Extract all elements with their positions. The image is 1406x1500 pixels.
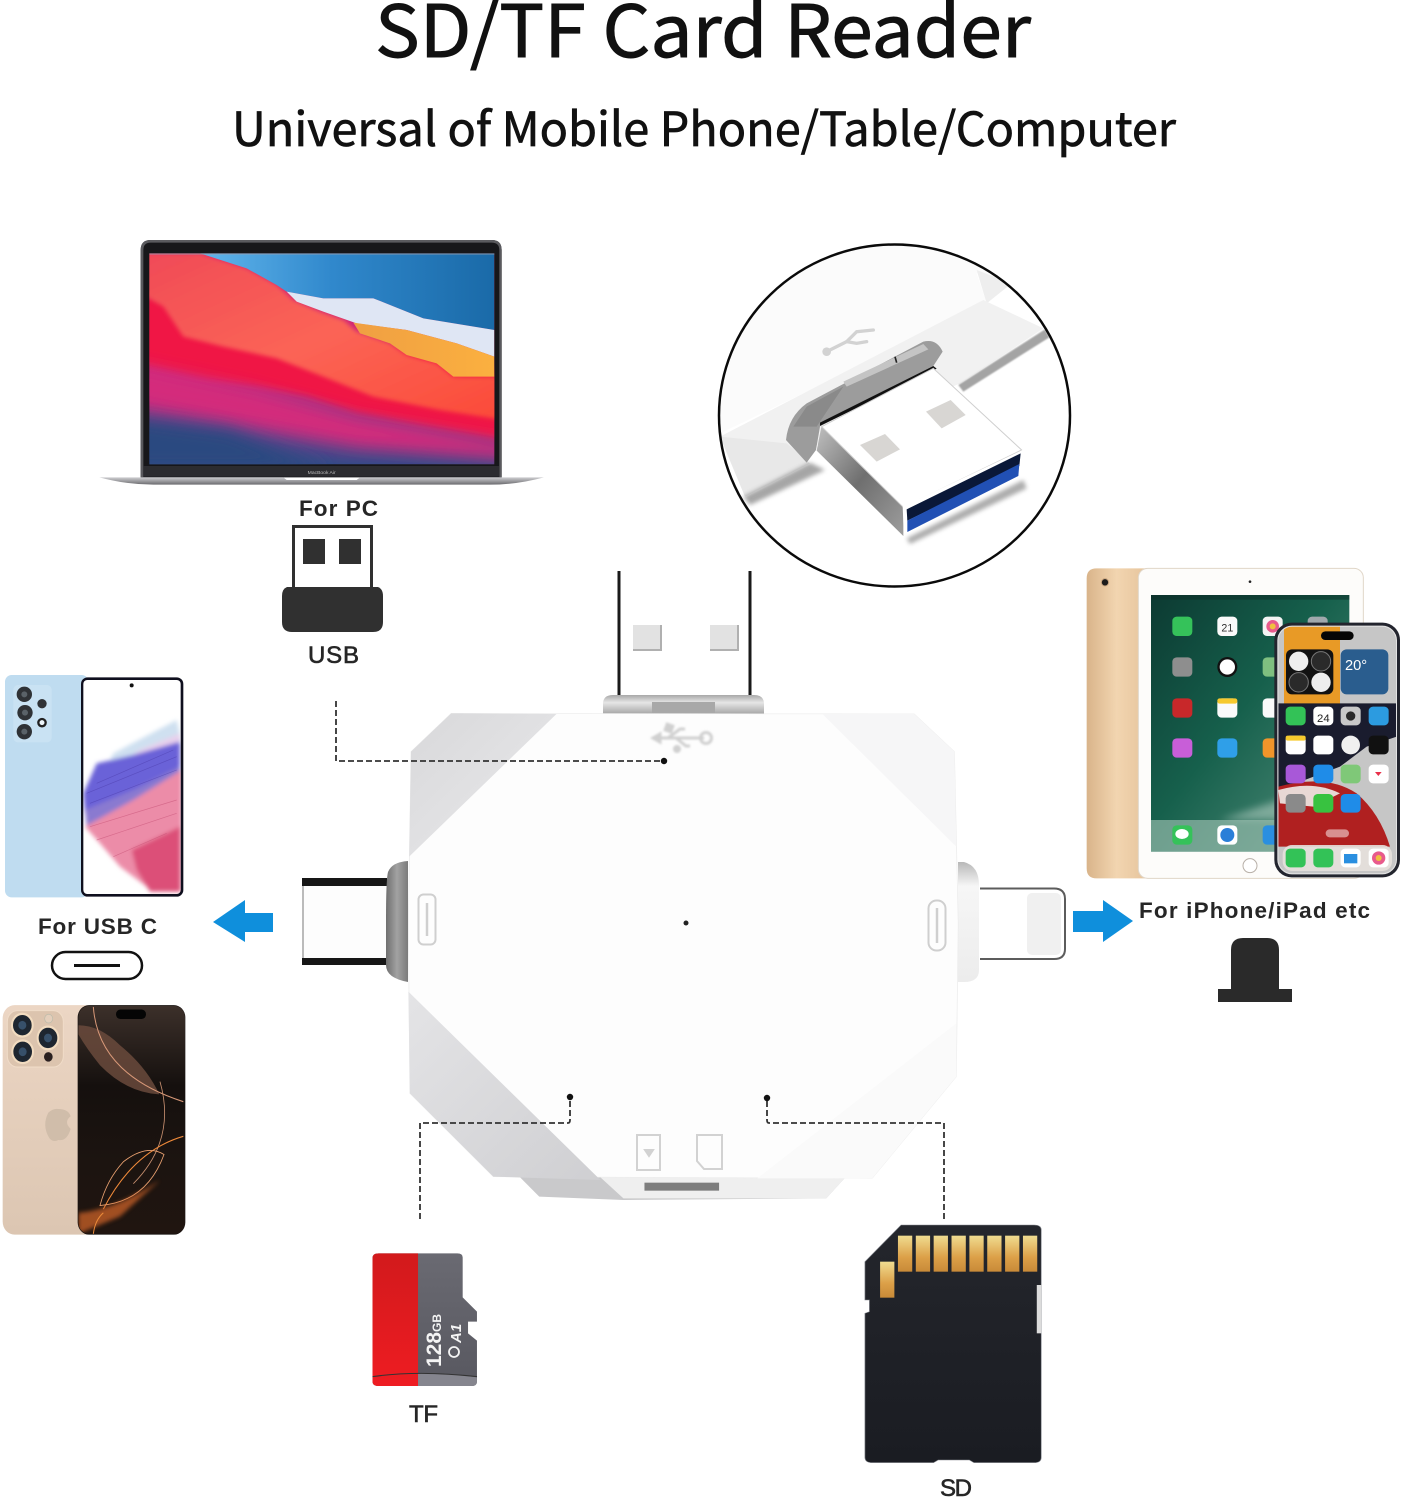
icon: TF slot mark bbox=[637, 1135, 660, 1170]
iPad back bbox=[1087, 568, 1147, 878]
card reader device bbox=[302, 571, 1065, 1200]
dashed leader: TF bbox=[420, 1094, 573, 1219]
Lightning plug bbox=[958, 862, 1065, 982]
port mark: USB C bbox=[418, 894, 436, 944]
iPad front: 21 bbox=[1221, 622, 1233, 634]
label: TF: TF bbox=[409, 1401, 438, 1428]
label: For iPhone/iPad etc: For iPhone/iPad etc bbox=[1139, 898, 1370, 923]
label: For USB C: For USB C bbox=[38, 914, 157, 939]
phone back bbox=[5, 675, 88, 897]
iPhone front: 24 bbox=[1317, 713, 1330, 725]
SD card bbox=[865, 1225, 1041, 1463]
TF card capacity text bbox=[423, 1314, 465, 1367]
weather widget bbox=[1341, 649, 1388, 694]
arrow: left to USB C devices bbox=[213, 900, 273, 942]
Samsung phone bbox=[5, 675, 183, 897]
laptop illustration: MacBook Air bbox=[308, 470, 336, 476]
device body bbox=[408, 713, 958, 1178]
underside bbox=[520, 1177, 845, 1200]
gold contacts bbox=[880, 1236, 1037, 1298]
weather widget: 20° bbox=[1345, 658, 1367, 674]
USB trident logo bbox=[653, 724, 712, 752]
phone front bbox=[81, 677, 183, 897]
USB A plug bbox=[603, 571, 764, 714]
phone back bbox=[3, 1005, 98, 1235]
center dot bbox=[684, 920, 688, 926]
iPhone front bbox=[1274, 623, 1400, 877]
port mark: Lightning bbox=[928, 900, 946, 950]
subtitle: Universal of Mobile Phone/Table/Computer bbox=[232, 91, 1177, 160]
corner facets bbox=[408, 713, 956, 1180]
dashed leader: SD bbox=[764, 1095, 944, 1219]
arrow: right to Lightning devices bbox=[1073, 900, 1133, 942]
icon: USB plug bbox=[282, 526, 383, 632]
laptop illustration bbox=[99, 240, 544, 485]
icon: Lightning port bbox=[1218, 938, 1292, 1002]
TF card capacity text: 128GB bbox=[423, 1314, 446, 1367]
icon: SD slot mark bbox=[697, 1135, 722, 1169]
phone screen bbox=[78, 1005, 185, 1235]
USB C plug bbox=[302, 861, 408, 982]
TF card bbox=[373, 1253, 477, 1386]
dashed leader: USB bbox=[336, 701, 667, 764]
icon: USB C port bbox=[52, 952, 142, 979]
TF card capacity text: A1 bbox=[448, 1324, 465, 1344]
iPhone Pro bbox=[3, 1005, 185, 1235]
iPad front bbox=[1138, 568, 1363, 878]
iPhone dock bbox=[1283, 845, 1392, 871]
clock widget bbox=[1286, 649, 1333, 694]
label: USB: USB bbox=[308, 642, 359, 669]
magnified USB connector circle bbox=[717, 243, 1077, 593]
iPad and iPhone illustration bbox=[1087, 568, 1400, 878]
label: For PC: For PC bbox=[299, 496, 378, 521]
